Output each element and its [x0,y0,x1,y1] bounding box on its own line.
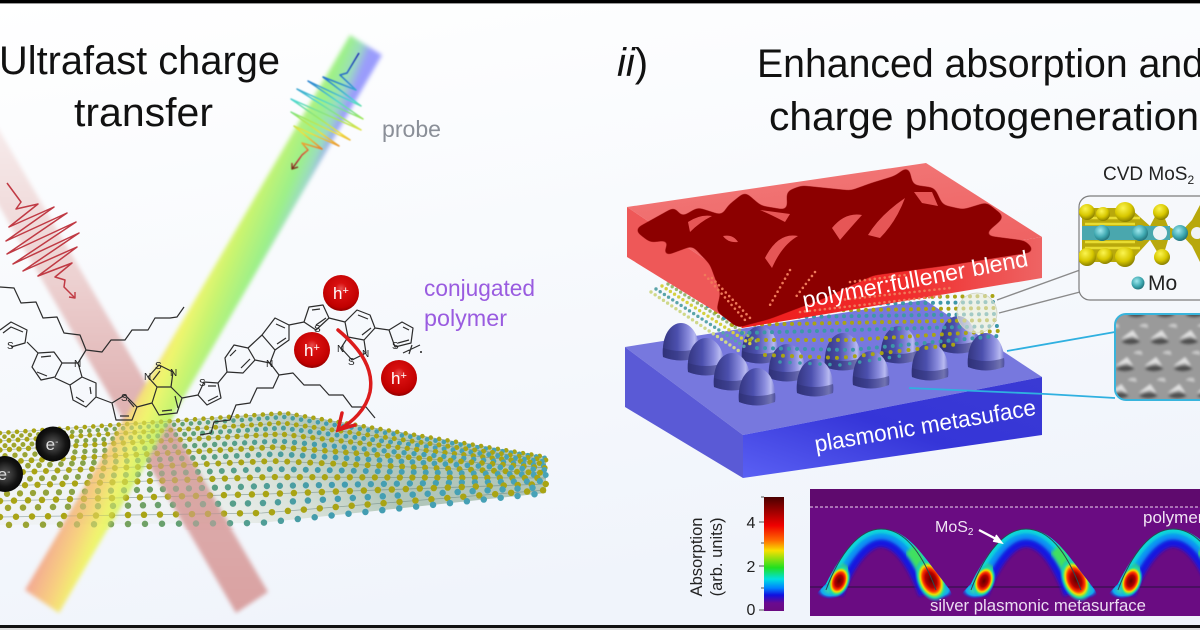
title: ultrafast charge transfer: transfer [74,91,213,135]
hole: h+: + [343,285,349,297]
hole: h+: + [314,342,320,354]
atom labels: S [348,357,355,368]
atom labels: S [7,341,14,352]
hole: h+: h [304,341,314,360]
connector: MoS2 to inset [997,270,1080,313]
conjugated polymer molecule [0,287,422,435]
panel: ultrafast charge transfer [0,35,546,613]
atom labels: N [266,359,273,370]
colorbar title: Absorption [688,518,706,596]
inset: SEM of metasurface [1114,313,1200,401]
blue plasmonic slab [625,300,1042,478]
label: CVD MoS2: CVD MoS [1103,164,1187,185]
atom labels: S [155,361,162,372]
legend: Mo atom [1132,272,1177,295]
charge transfer arrow [338,330,371,430]
probe beam, rainbow [25,35,382,613]
red polymer slab [627,163,1042,328]
label: conjugated polymer: polymer [424,305,507,331]
panel: enhanced absorption [617,41,1200,619]
label: conjugated polymer [424,275,535,331]
title: ultrafast charge transfer: Ultrafast charge [0,39,280,83]
colorbar title: (arb. units) [708,518,726,596]
atom labels: N [362,349,369,360]
atom labels: S [121,393,128,404]
MoS2 monolayer lattice [0,411,549,530]
atom labels [7,324,399,404]
electron: e-: - [55,437,58,448]
colorbar ticks [747,515,756,619]
electron: e- [36,426,70,462]
connector: metasurface to SEM [909,332,1115,398]
colorbar ticks: 2 [747,559,756,576]
atom labels: S [392,341,399,352]
label: probe: probe [382,116,441,142]
polymer domains [638,170,1031,325]
slab label: plasmonic metasuface: plasmonic metasuface [812,394,1038,457]
colorbar ticks: 4 [747,515,756,532]
pump beam [0,123,268,613]
label: silver plasmonic metasurface: silver plasmonic metasurface [930,597,1146,615]
legend: Mo atom: Mo [1148,272,1177,295]
probe pulse [291,53,363,169]
atom labels: N [337,344,344,355]
heading: enhanced absorption and charge photogeneration: charge photogeneration [769,95,1199,139]
absorption heat map [810,489,1200,616]
colorbar title [688,518,726,596]
label: conjugated polymer: conjugated [424,275,535,301]
nanodome array [663,316,1004,406]
gaps in polymer domains [688,192,938,268]
heading: enhanced absorption and charge photogeneration [757,42,1200,139]
electron: e- [0,456,23,492]
atom labels: N [74,359,81,370]
heading: enhanced absorption and charge photogeneration: Enhanced absorption and [757,42,1200,86]
atom labels: N [170,368,177,379]
title: ultrafast charge transfer [0,39,280,135]
panel label: ii): ii) [617,41,648,85]
hole: h+: h [333,284,343,303]
label: MoS2 in map: 2 [968,527,974,538]
colorbar ticks: 0 [747,602,756,619]
MoS2 layer, right panel [651,284,998,365]
hole: h+ [381,360,417,396]
label: CVD MoS2: 2 [1187,173,1194,187]
atom labels: S [314,324,321,335]
hole: h+: h [391,369,401,388]
electron: e-: e [46,435,55,454]
hole: h+ [323,275,359,311]
atom labels: N [144,372,151,383]
hole: h+ [294,332,330,368]
label: MoS2 in map: MoS [935,519,968,536]
atom labels: S [199,378,206,389]
beams tint over lattice [58,414,234,530]
inset: MoS2 crystal structure [1078,196,1200,300]
pump pulse [6,183,79,298]
electron: e-: - [7,467,10,478]
colorbar [688,497,784,619]
hole: h+: + [401,370,407,382]
zoom circle on MoS2 [957,293,997,333]
slab label: polymer:fullener blend: polymer:fullener blend [800,245,1030,313]
arrow to MoS2 layer [979,530,1002,543]
blend lattice seen through slab [705,270,950,320]
